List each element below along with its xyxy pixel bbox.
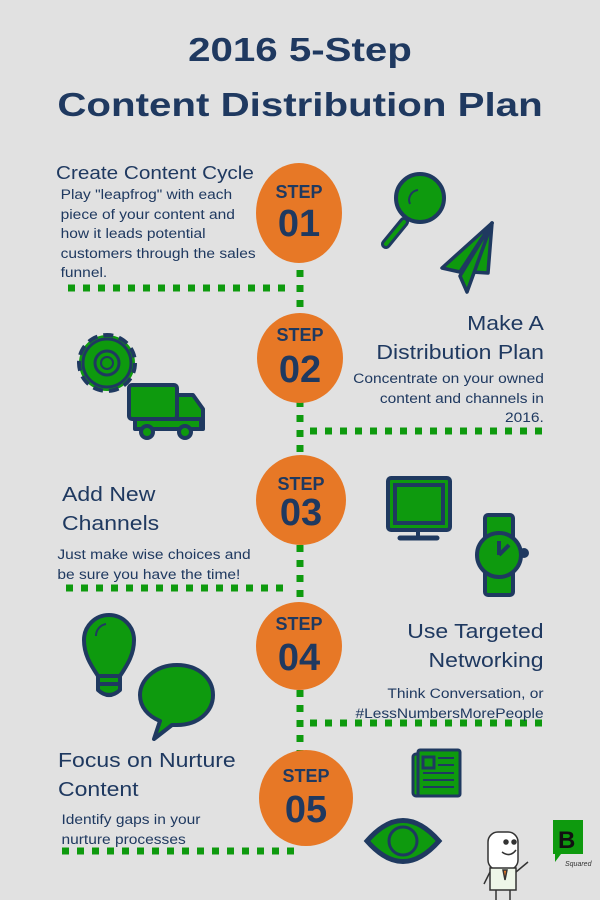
step 1 badge: 01 [278, 203, 320, 245]
step 3 badge: STEP [277, 474, 325, 494]
icon: newspaper [413, 750, 460, 796]
step 1 text: funnel. [61, 265, 107, 280]
step 4 text [356, 621, 544, 721]
step 1 badge: STEP [275, 182, 323, 202]
step 5 badge: 05 [285, 789, 327, 831]
step 1 text: Create Content Cycle [56, 163, 254, 183]
icon: magnifier [386, 174, 444, 244]
step 5 text: nurture processes [61, 832, 186, 846]
icon: truck [129, 385, 203, 438]
logo: B [558, 827, 575, 854]
logo [553, 820, 593, 868]
step 5 badge [259, 750, 353, 846]
step 1 text: how it leads potential [61, 226, 206, 241]
step 5 badge: STEP [282, 766, 330, 786]
step 4 text: Use Targeted [408, 621, 544, 643]
step 3 badge: 03 [280, 492, 322, 534]
step 2 badge: STEP [276, 325, 324, 345]
step 5 text: Focus on Nurture [58, 750, 236, 772]
step 3 text: Channels [62, 513, 159, 535]
step 2 text: Make A [467, 313, 544, 335]
title [57, 31, 543, 123]
logo: Squared [565, 861, 593, 868]
title: 2016 5-Step [188, 31, 412, 68]
step 4 text: Think Conversation, or [388, 686, 544, 701]
step 1 text: customers through the sales [61, 246, 256, 260]
step 3 text: Add New [62, 484, 155, 506]
step 3 text: Just make wise choices and [57, 547, 251, 562]
step 2 badge: 02 [279, 349, 321, 391]
title: Content Distribution Plan [57, 86, 543, 123]
icon: eye [367, 820, 439, 862]
step 2 text: Distribution Plan [377, 342, 544, 364]
step 2 text [353, 313, 544, 425]
step 4 badge: 04 [278, 637, 320, 679]
step 4 text: Networking [429, 650, 544, 672]
icon: paper plane [442, 223, 492, 292]
step 1 text: piece of your content and [61, 206, 235, 222]
step 4 badge [256, 602, 342, 690]
illustration: cartoon man [484, 832, 528, 900]
icon: watch [477, 515, 527, 595]
step 1 text: Play "leapfrog" with each [61, 187, 232, 202]
step 5 text: Content [58, 779, 139, 801]
step 1 text [56, 163, 256, 280]
step 5 text: Identify gaps in your [61, 812, 200, 827]
step 2 text: content and channels in [380, 390, 544, 406]
step 5 text [58, 750, 236, 847]
step 3 text [57, 484, 251, 582]
dotted timeline [62, 255, 546, 851]
icon: gear [79, 335, 135, 391]
step 4 text: #LessNumbersMorePeople [356, 706, 544, 720]
step 2 badge [257, 313, 343, 403]
step 3 text: be sure you have the time! [57, 566, 240, 582]
step 3 badge [256, 455, 346, 545]
icon: light bulb [84, 615, 134, 695]
icon: speech bubble [140, 665, 213, 739]
step 2 text: 2016. [505, 410, 544, 425]
icon: monitor [388, 478, 450, 538]
step 2 text: Concentrate on your owned [353, 371, 544, 386]
step 4 badge: STEP [275, 614, 323, 634]
step 1 badge [256, 163, 342, 263]
